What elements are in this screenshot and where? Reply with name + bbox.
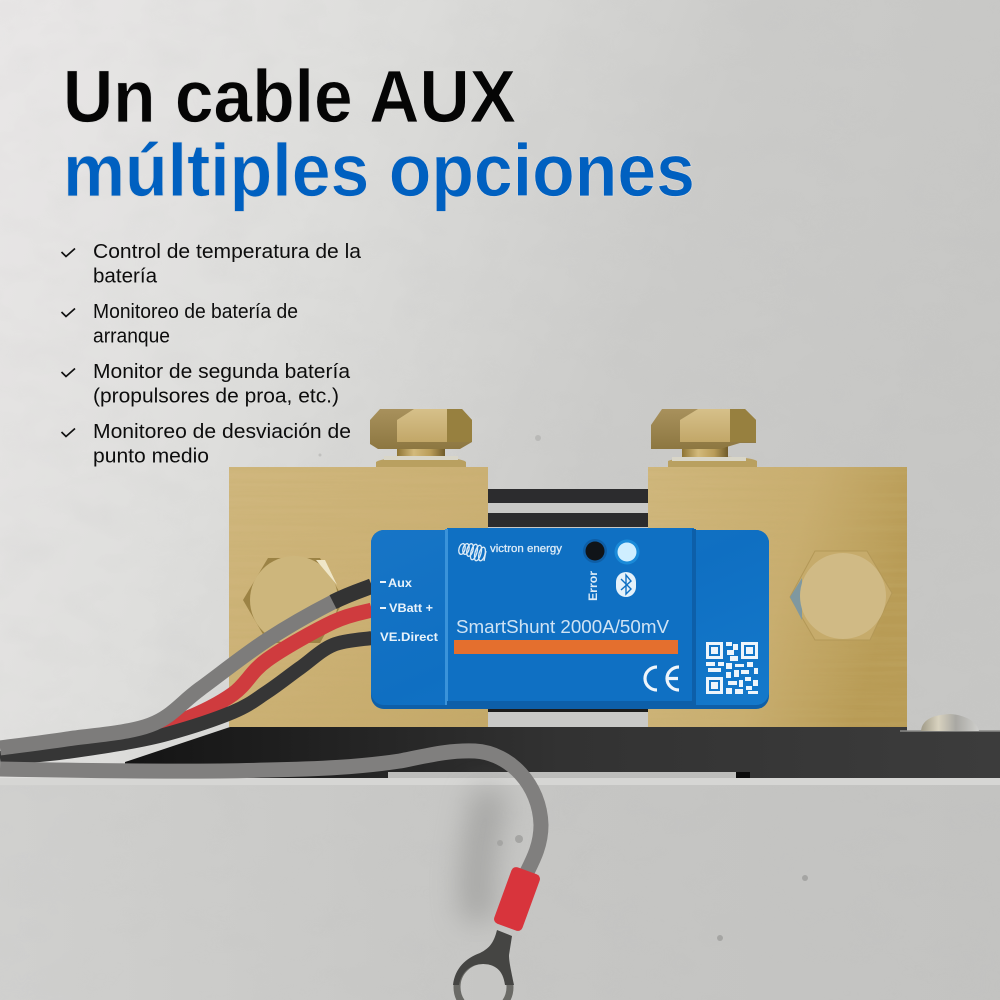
item: second battery: (propulsores de proa, etc.) [93,386,339,408]
grey cable [0,751,541,872]
CE mark [645,667,679,690]
port labels: VE.Direct [380,632,438,644]
item: second battery: Monitor de segunda batería [93,361,351,383]
left top nut [370,409,472,467]
port labels: VBatt + [389,603,433,615]
grey aux cable with ring terminal [0,751,541,1000]
QR code [706,642,758,694]
screw on plate [921,714,979,731]
background: concrete wall [0,0,1000,780]
center shunt resistor plates [488,489,648,727]
item: starter battery [62,301,298,348]
red crimp sleeve [493,866,541,932]
error LED [583,539,607,601]
right hex bolt [790,551,892,640]
victron energy logo: victron energy [490,543,563,555]
bluetooth icon [616,572,636,597]
port labels: Aux [388,578,413,590]
error LED: Error [588,570,600,601]
item: midpoint deviation [62,421,351,468]
victron energy logo [458,543,563,562]
wires going to the left [0,586,372,758]
left hex bolt [243,556,344,644]
item: midpoint deviation: Monitoreo de desviación de [93,421,351,443]
item: temperature control: batería [93,266,158,288]
SmartShunt device [371,528,769,709]
orange bar [454,640,678,654]
title: Un cable AUX [63,55,516,138]
model name: SmartShunt 2000A/50mV [456,617,669,637]
feature checklist [62,241,362,468]
item: temperature control: Control de temperatura de la [93,241,362,263]
black wire [0,638,372,758]
item: midpoint deviation: punto medio [93,446,209,468]
ring terminal [453,930,514,1000]
title: múltiples opciones [63,129,695,212]
item: starter battery: Monitoreo de batería de [93,301,298,323]
bluetooth LED [614,540,640,564]
left brass terminal block [229,467,488,727]
right top nut [651,409,757,467]
item: starter battery: arranque [93,326,170,348]
item: temperature control [62,241,362,288]
red wire [20,610,372,752]
port labels [380,578,438,644]
dark section of grey wire [333,586,372,602]
item: second battery [62,361,351,408]
dark mounting plate [125,727,1000,778]
title [63,55,695,212]
grey wire [0,586,372,748]
right brass terminal block [648,467,907,727]
lower wall ledge [0,778,1000,1000]
